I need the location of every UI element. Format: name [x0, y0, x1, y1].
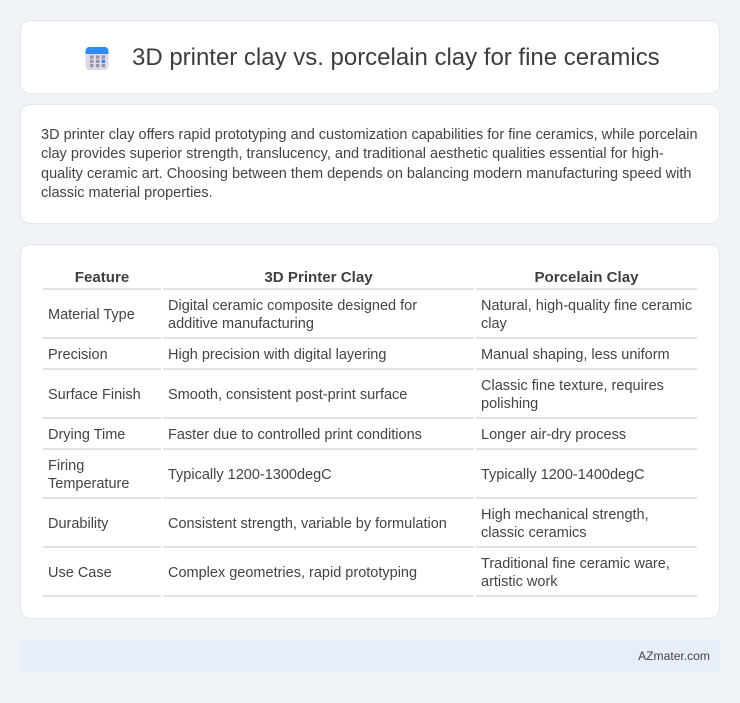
row: firing temperature: Typically 1200-1300degC	[168, 467, 332, 483]
row: precision: Precision	[48, 347, 108, 363]
row: surface finish: polishing	[481, 396, 538, 412]
footer brand: AZmater.com	[638, 649, 710, 663]
summary text: quality ceramic art. Choosing between them depends on balancing modern manufacturing speed with	[41, 166, 691, 182]
row: surface finish: Classic fine texture, requires	[481, 378, 664, 394]
table header: Porcelain Clay	[534, 269, 639, 286]
row: drying time: Faster due to controlled print conditions	[168, 427, 422, 443]
row: material type: additive manufacturing	[168, 316, 314, 332]
row: firing temperature: Temperature	[48, 476, 129, 492]
row: firing temperature: Typically 1200-1400degC	[481, 467, 645, 483]
row: material type: clay	[481, 316, 507, 332]
row: precision	[48, 347, 670, 363]
summary text	[41, 127, 698, 201]
row: durability: classic ceramics	[481, 525, 587, 541]
row: material type: Material Type	[48, 307, 135, 323]
row: use case: Traditional fine ceramic ware,	[481, 556, 670, 572]
panel: title card	[20, 20, 720, 94]
row: drying time: Longer air-dry process	[481, 427, 626, 443]
row: durability: Durability	[48, 516, 108, 532]
row: use case: Use Case	[48, 565, 112, 581]
footer bar	[20, 640, 720, 673]
row: use case: Complex geometries, rapid prototyping	[168, 565, 417, 581]
row: surface finish: Surface Finish	[48, 387, 141, 403]
row: material type	[48, 298, 692, 332]
icon: calendar	[86, 47, 108, 70]
row: durability	[48, 507, 649, 541]
table header	[75, 269, 639, 286]
table header: Feature	[75, 269, 129, 286]
panel: summary	[20, 104, 720, 224]
row: material type: Digital ceramic composite designed for	[168, 298, 417, 314]
summary text: classic material properties.	[41, 185, 213, 201]
row: durability: High mechanical strength,	[481, 507, 649, 523]
summary text: 3D printer clay offers rapid prototyping and customization capabilities for fine ceramics, while porcelain	[41, 127, 698, 143]
row: durability: Consistent strength, variable by formulation	[168, 516, 447, 532]
row: precision: High precision with digital layering	[168, 347, 386, 363]
row: precision: Manual shaping, less uniform	[481, 347, 670, 363]
row: use case: artistic work	[481, 574, 558, 590]
row: surface finish	[48, 378, 664, 412]
row: firing temperature: Firing	[48, 458, 84, 474]
row: firing temperature	[48, 458, 645, 492]
title: 3D printer clay vs. porcelain clay for fine ceramics	[132, 44, 660, 71]
row: drying time: Drying Time	[48, 427, 125, 443]
row: material type: Natural, high-quality fine ceramic	[481, 298, 692, 314]
panel: comparison table	[20, 244, 720, 619]
table header: 3D Printer Clay	[264, 269, 373, 286]
row: drying time	[48, 427, 626, 443]
row: surface finish: Smooth, consistent post-print surface	[168, 387, 407, 403]
summary text: clay provides superior strength, translucency, and traditional aesthetic qualities essential for high-	[41, 146, 664, 162]
row: use case	[48, 556, 670, 590]
